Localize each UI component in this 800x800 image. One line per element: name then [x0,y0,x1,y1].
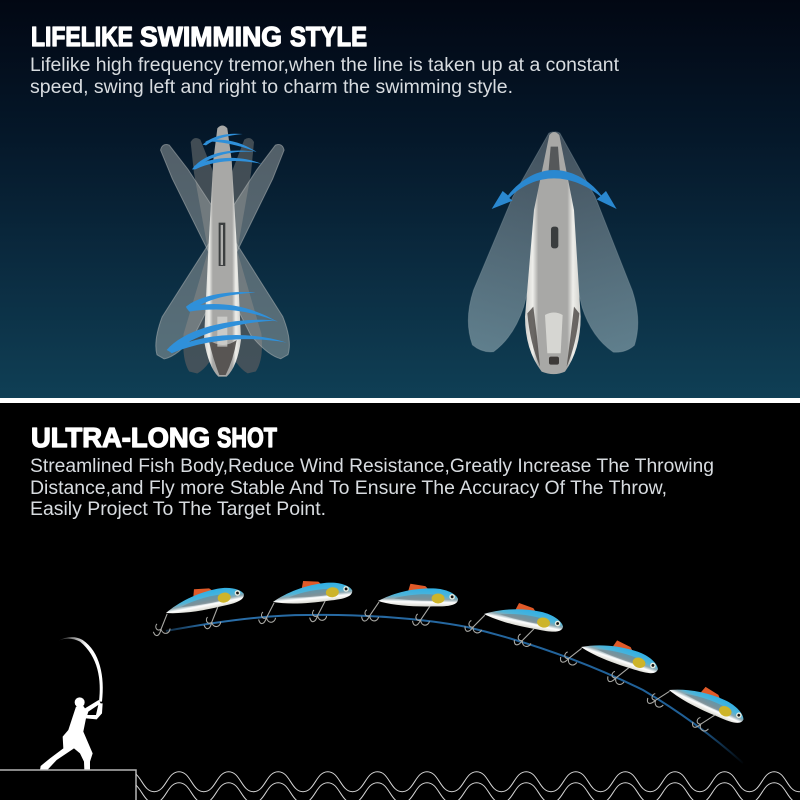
divider: white band [0,398,800,403]
icon: blue double-headed arc arrow [492,170,617,209]
illustration: lure front view with narrow swing [457,124,649,374]
platform: pier [0,770,136,800]
text block: swimming description: Lifelike high frequency tremor,when the line is taken up at a constant [30,55,620,76]
text block: swimming description: speed, swing left and right to charm the swimming style. [30,77,513,98]
illustration: lure top view with wide swing [145,125,300,377]
text block: long shot description [30,456,714,520]
water waves [129,772,800,800]
icon: blue motion swooshes [167,134,287,353]
text block: long shot description: Streamlined Fish Body,Reduce Wind Resistance,Greatly Increase The Throwing [30,456,714,477]
text block: swimming description [30,55,620,98]
lure 4 [463,593,566,654]
panel: lifelike swimming style [0,0,800,398]
heading: lifelike swimming style: SWIMMING [140,21,282,52]
heading: lifelike swimming style [31,21,367,52]
heading: ultra-long shot: ULTRA-LONG [31,422,210,453]
lure 2 [255,576,355,627]
lure 3 [361,583,458,626]
heading: lifelike swimming style: STYLE [290,21,367,52]
arc: cast trajectory line [166,615,743,763]
icon: angler silhouette casting [40,637,103,770]
lure 5 [558,625,663,695]
heading: ultra-long shot: SHOT [217,422,277,453]
heading: lifelike swimming style: LIFELIKE [31,21,133,52]
lure 6 [645,667,749,744]
lure 1 [147,580,249,639]
lures in flight [147,576,749,744]
panel: ultra-long shot [0,403,800,800]
text block: long shot description: Easily Project To The Target Point. [30,499,326,520]
text block: long shot description: Distance,and Fly more Stable And To Ensure The Accuracy Of The Throw, [30,478,667,499]
